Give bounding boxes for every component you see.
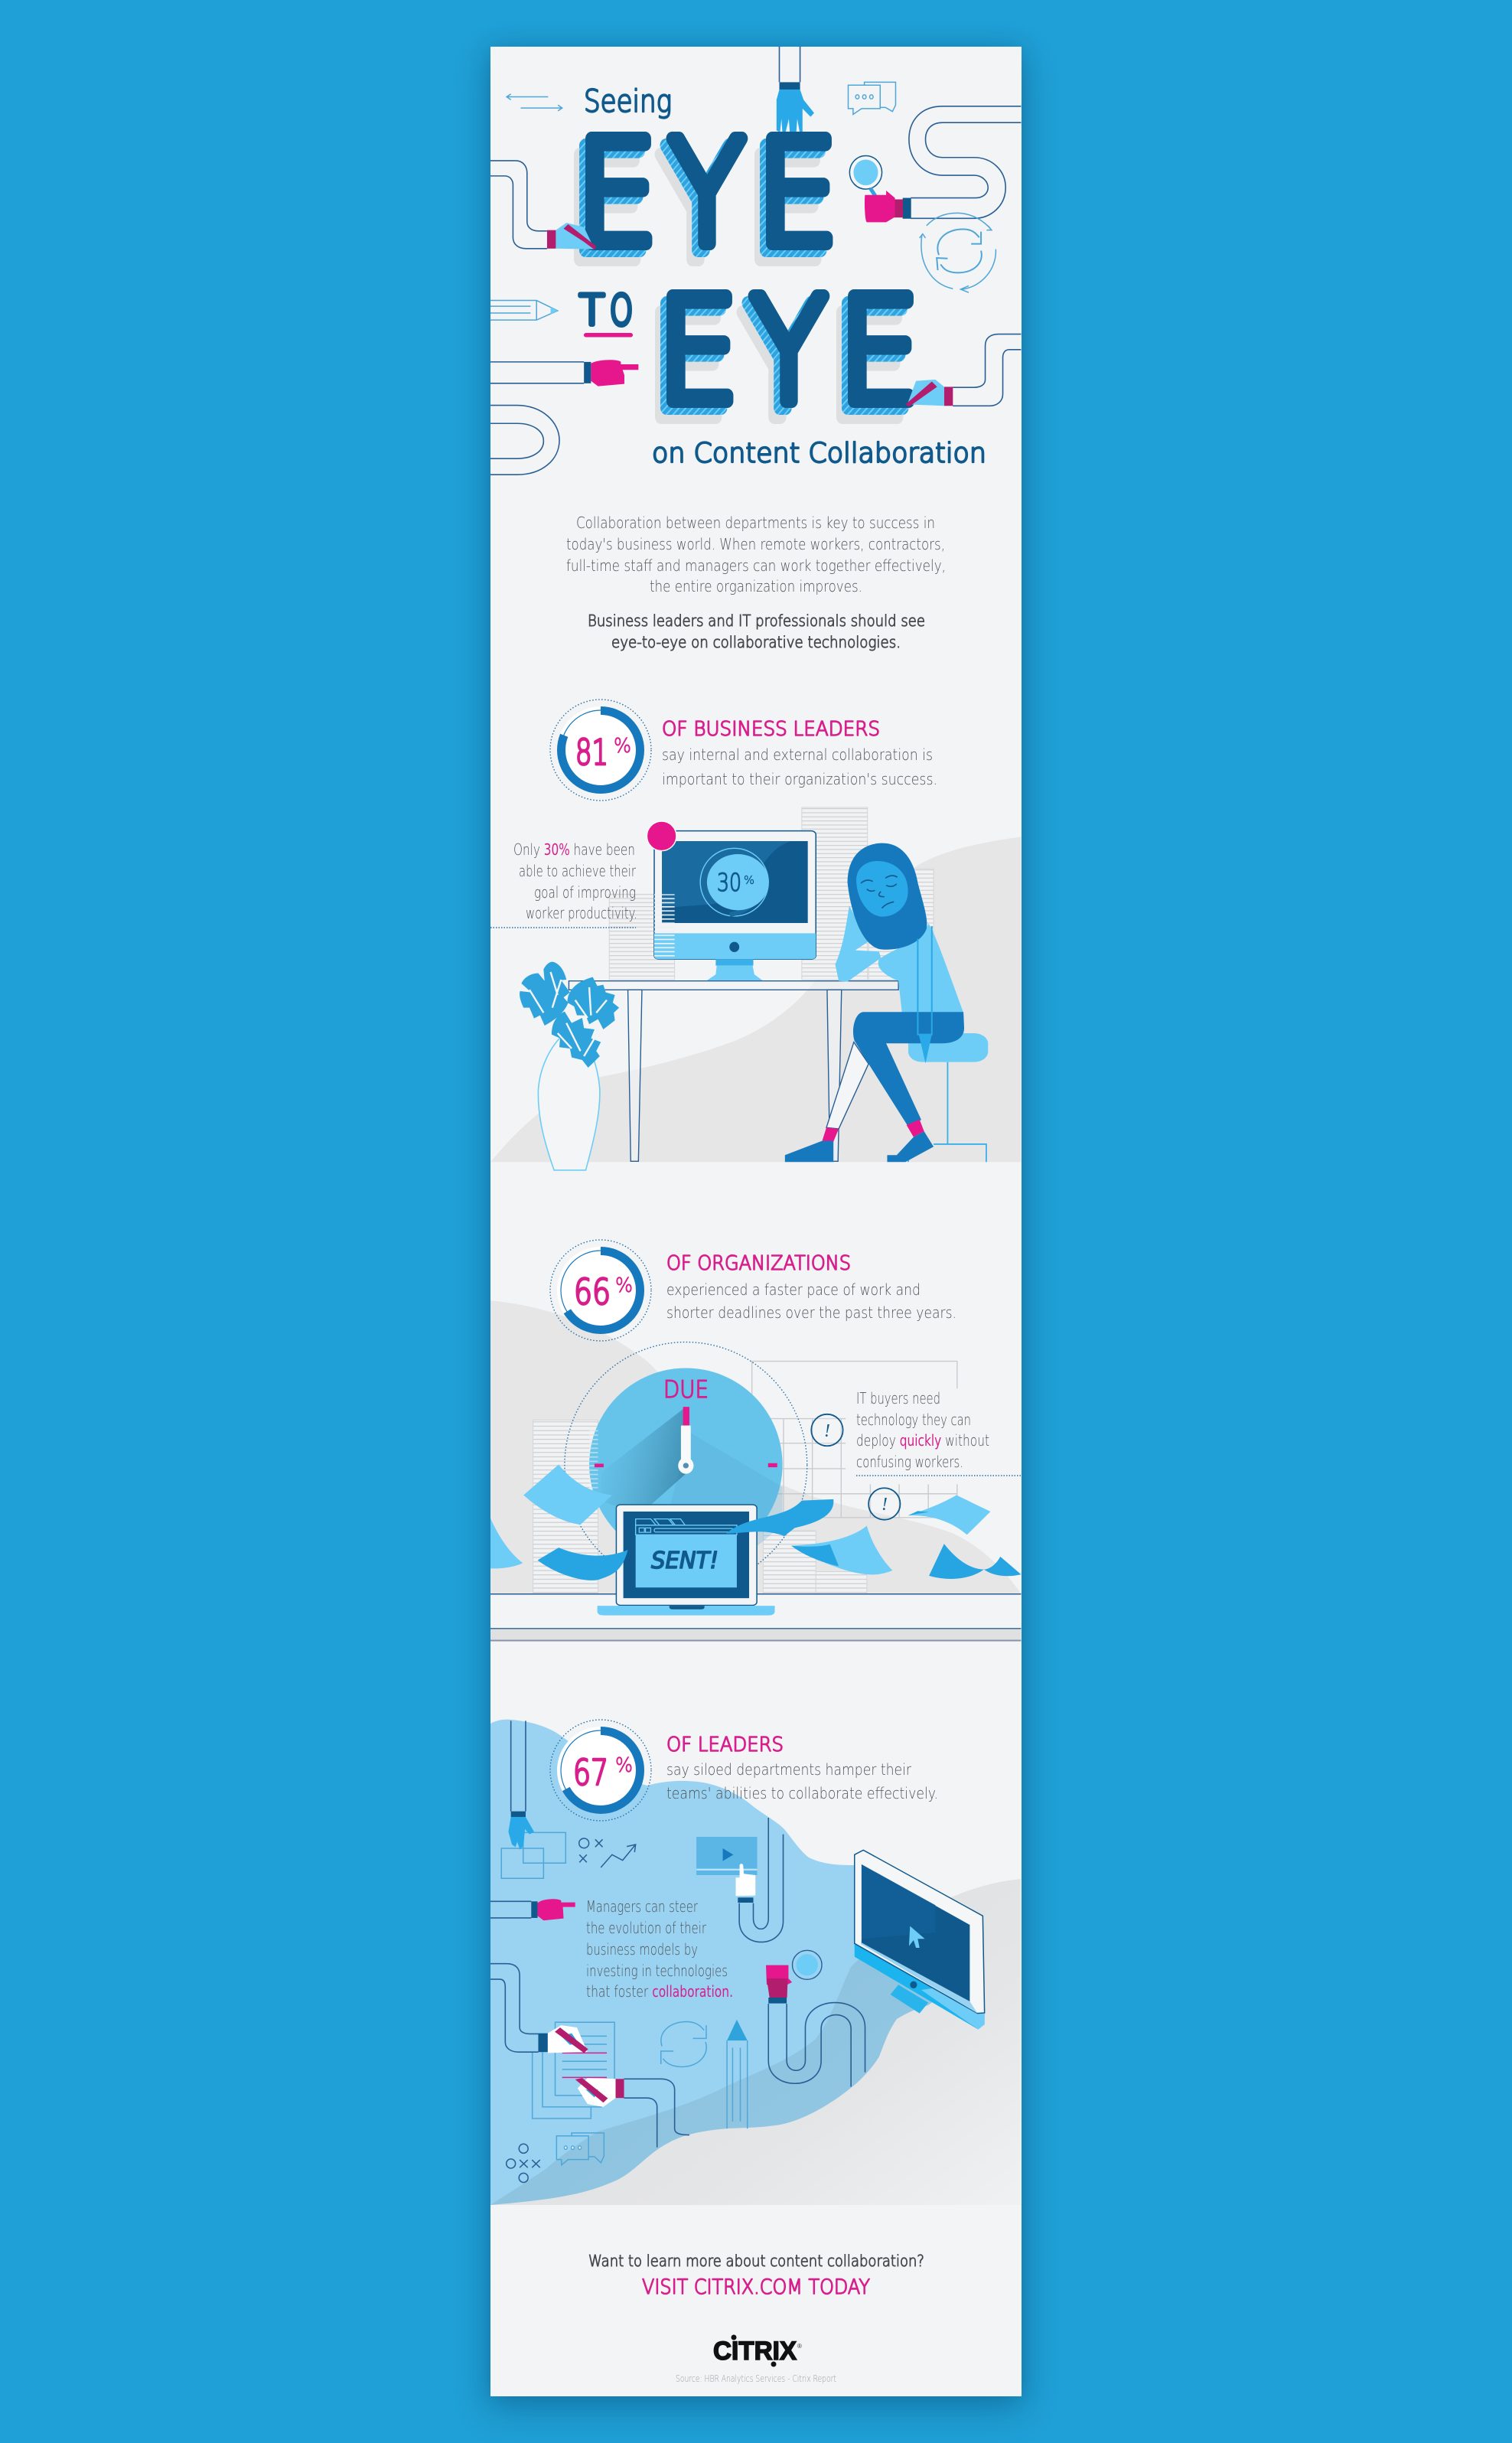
- callout: IT buyers: deploy quickly without: [856, 1431, 989, 1450]
- icon: refresh: [661, 2022, 706, 2066]
- flying papers behind: [490, 1465, 612, 1568]
- callout: IT buyers: IT buyers need: [856, 1389, 940, 1407]
- icon: pencil: [490, 301, 558, 320]
- label: DUE: DUE: [663, 1376, 709, 1404]
- callout: IT buyers: confusing workers.: [856, 1453, 963, 1471]
- title: second EYE, striped layer: E: [651, 276, 732, 442]
- intro paragraph: the entire organization improves.: [650, 577, 862, 595]
- callout: only 30%: [490, 840, 637, 928]
- grey hill: [490, 1300, 1021, 1593]
- illustration: leaders lower icons: [490, 1964, 865, 2182]
- heading: of business leaders: OF BUSINESS LEADERS: [662, 718, 880, 741]
- icon: white pointing hand: [736, 1864, 755, 1903]
- callout: only 30%: Only 30% have been: [513, 840, 635, 859]
- arm tube top right: [909, 106, 1021, 218]
- donut: 81%: %: [614, 735, 631, 758]
- title: second EYE, striped layer: [651, 275, 914, 442]
- icon: video card: [696, 1837, 758, 1875]
- alert marks: !: [824, 1421, 830, 1441]
- callout: managers: investing in technologies: [586, 1962, 728, 1980]
- title: first EYE, shadow layer: Y: [658, 126, 733, 294]
- title: second EYE, shadow layer: [646, 284, 908, 452]
- intro paragraph: Collaboration between departments is key to success in: [576, 514, 935, 532]
- callout: only 30%: able to achieve their: [519, 862, 637, 880]
- title: first EYE, shadow layer: E: [745, 127, 826, 294]
- description: organizations: [666, 1280, 956, 1322]
- donut: 67%: 67: [573, 1752, 608, 1793]
- intro paragraph: [566, 514, 946, 595]
- icon: fist with magnifier: [766, 1950, 822, 2004]
- building grid: [752, 1362, 957, 1518]
- title: second EYE, striped layer: E: [833, 276, 914, 442]
- panel: infographic background: [490, 47, 1021, 2396]
- description: business leaders: important to their organization's success.: [662, 770, 937, 788]
- icon: speech bubbles: [556, 2133, 604, 2165]
- title: second EYE, shadow layer: E: [827, 285, 908, 452]
- call to action link: VISIT CITRIX.COM TODAY: [642, 2275, 870, 2299]
- tube: right arm: [624, 2079, 689, 2148]
- title: first EYE: Y: [670, 110, 745, 278]
- paper stacks: [609, 807, 934, 980]
- callout: managers: the evolution of their: [586, 1919, 707, 1937]
- paper stacks: [533, 1420, 867, 1593]
- illustration: deadline scene background: [490, 1300, 1021, 1641]
- laptop: [598, 1505, 775, 1616]
- header hands over letters: [490, 223, 1021, 475]
- title: second EYE: E: [839, 269, 920, 435]
- icon: right writing hand: [575, 2078, 624, 2107]
- title: first EYE: E: [576, 111, 657, 278]
- heading: of organizations: OF ORGANIZATIONS: [666, 1252, 851, 1275]
- icon: refresh arrows: [920, 213, 996, 292]
- flying papers front: [538, 1495, 1021, 1580]
- section: leaders stat: [490, 1720, 1021, 2205]
- icon: pink pointing hand: [490, 1899, 575, 1920]
- title: second EYE, shadow layer: E: [646, 285, 727, 452]
- title: second EYE: Y: [751, 268, 826, 435]
- title: TO: [579, 286, 633, 337]
- alert marks: !: [881, 1495, 888, 1515]
- section: organizations stat: [490, 1240, 1021, 1641]
- icon: stacked documents: [533, 2022, 614, 2118]
- title: Seeing: Seeing: [584, 84, 672, 119]
- illustration: desk scene: [609, 807, 934, 981]
- woman sitting at desk: [785, 843, 964, 1162]
- callout: managers: [586, 1897, 733, 2001]
- donut: 67%: [550, 1720, 651, 1821]
- stool: [908, 1033, 988, 1162]
- title: first EYE: [576, 110, 838, 278]
- section: footer: [588, 2252, 924, 2384]
- icon: reaching hand from top: [777, 47, 814, 138]
- title: TO: O: [610, 286, 633, 334]
- title: on Content Collaboration: on Content Collaboration: [652, 438, 986, 469]
- callout: only 30%: worker productivity.: [526, 904, 637, 922]
- bold intro statement: eye-to-eye on collaborative technologies.: [611, 633, 901, 651]
- donut: 66%: %: [615, 1274, 633, 1297]
- title: TO: T: [579, 286, 604, 334]
- icon: pointing pink hand: [490, 360, 638, 387]
- label: SENT!: SENT!: [651, 1548, 719, 1574]
- monitor: [647, 821, 816, 981]
- title: first EYE, striped layer: Y: [663, 117, 738, 285]
- call to action question: Want to learn more about content collaboration?: [588, 2252, 924, 2270]
- callout: managers: business models by: [586, 1940, 698, 1959]
- description: organizations: shorter deadlines over the past three years.: [666, 1303, 956, 1322]
- donut: 66%: [550, 1240, 651, 1341]
- section: title header: [490, 47, 1021, 475]
- logo: Citrix: ®: [797, 2343, 802, 2350]
- illustration: leaders upper icons: [490, 1721, 985, 2030]
- tube: left arm: [490, 1964, 538, 2052]
- icon: strategy marks: [507, 2144, 540, 2182]
- donut: 67%: %: [615, 1754, 633, 1777]
- illustration: blue blob: [490, 1720, 949, 2205]
- logo: Citrix: CITRIX: [713, 2337, 797, 2366]
- icon: hand on folders: [501, 1721, 565, 1878]
- title: second EYE: [657, 268, 920, 435]
- tube: middle: [739, 1818, 784, 1942]
- icon: left writing hand: [538, 2025, 588, 2053]
- callout: IT buyers: technology they can: [856, 1411, 971, 1429]
- title: first EYE, shadow layer: E: [565, 127, 646, 294]
- donut: 66%: 66: [574, 1271, 611, 1313]
- source note: Source: HBR Analytics Services - Citrix Report: [676, 2373, 836, 2384]
- icon: double arrows: [507, 94, 562, 111]
- desk: [569, 981, 898, 1161]
- monitor isometric: [855, 1850, 985, 2030]
- icon: hand with marker, left: [547, 223, 596, 250]
- section: business leaders stat: [490, 700, 1021, 1170]
- title: first EYE, striped layer: E: [751, 118, 832, 285]
- callout: managers: that foster collaboration.: [586, 1982, 733, 2001]
- heading: of leaders: OF LEADERS: [666, 1734, 784, 1756]
- description: leaders: teams' abilities to collaborate effectively.: [666, 1784, 938, 1802]
- description: leaders: say siloed departments hamper their: [666, 1760, 912, 1779]
- title: first EYE, shadow layer: [565, 126, 826, 294]
- bottom band: [490, 1629, 1021, 1641]
- illustration: grey hill: [490, 837, 1021, 1162]
- title: first EYE: E: [757, 111, 838, 278]
- table lines: [490, 1593, 1021, 1595]
- callout: IT buyers: [856, 1389, 1021, 1476]
- icon: speech bubbles: [848, 82, 895, 115]
- arm tube left: [490, 161, 547, 249]
- header line illustrations: [490, 47, 1021, 292]
- intro paragraph: full-time staff and managers can work together effectively,: [566, 556, 946, 575]
- bold intro statement: Business leaders and IT professionals should see: [588, 612, 925, 630]
- bold intro statement: [588, 612, 925, 651]
- callout: only 30%: goal of improving: [534, 883, 636, 902]
- description: business leaders: [662, 745, 937, 788]
- tube: S curve: [768, 2003, 865, 2086]
- title: second EYE, striped layer: Y: [745, 275, 820, 442]
- vase with plant: [520, 962, 619, 1170]
- description: organizations: experienced a faster pace of work and: [666, 1280, 921, 1299]
- description: leaders: [666, 1760, 938, 1802]
- intro paragraph: today's business world. When remote workers, contractors,: [566, 535, 945, 553]
- title: second EYE: E: [657, 269, 738, 435]
- icon: strategy chart: [579, 1838, 636, 1867]
- description: business leaders: say internal and external collaboration is: [662, 745, 933, 764]
- donut: 81%: [550, 700, 651, 801]
- arm tube bottom left: [490, 406, 559, 475]
- icon: hand holding magnifier: [849, 155, 911, 222]
- monitor reading: 30%: 30: [717, 868, 741, 897]
- illustration: grey hill: [490, 1879, 1021, 2205]
- icon: alert circles: [811, 1414, 900, 1520]
- title: first EYE, striped layer: [570, 117, 832, 285]
- callout: managers: Managers can steer: [586, 1897, 699, 1916]
- icon: hand with marker, right: [905, 334, 1021, 406]
- clock: [565, 1342, 807, 1588]
- monitor reading: 30%: %: [744, 873, 754, 887]
- alert marks: [824, 1421, 888, 1515]
- title: second EYE, shadow layer: Y: [740, 284, 815, 452]
- icon: pencil: [727, 2020, 748, 2128]
- title: first EYE, striped layer: E: [570, 118, 651, 285]
- donut: 81%: 81: [575, 732, 608, 773]
